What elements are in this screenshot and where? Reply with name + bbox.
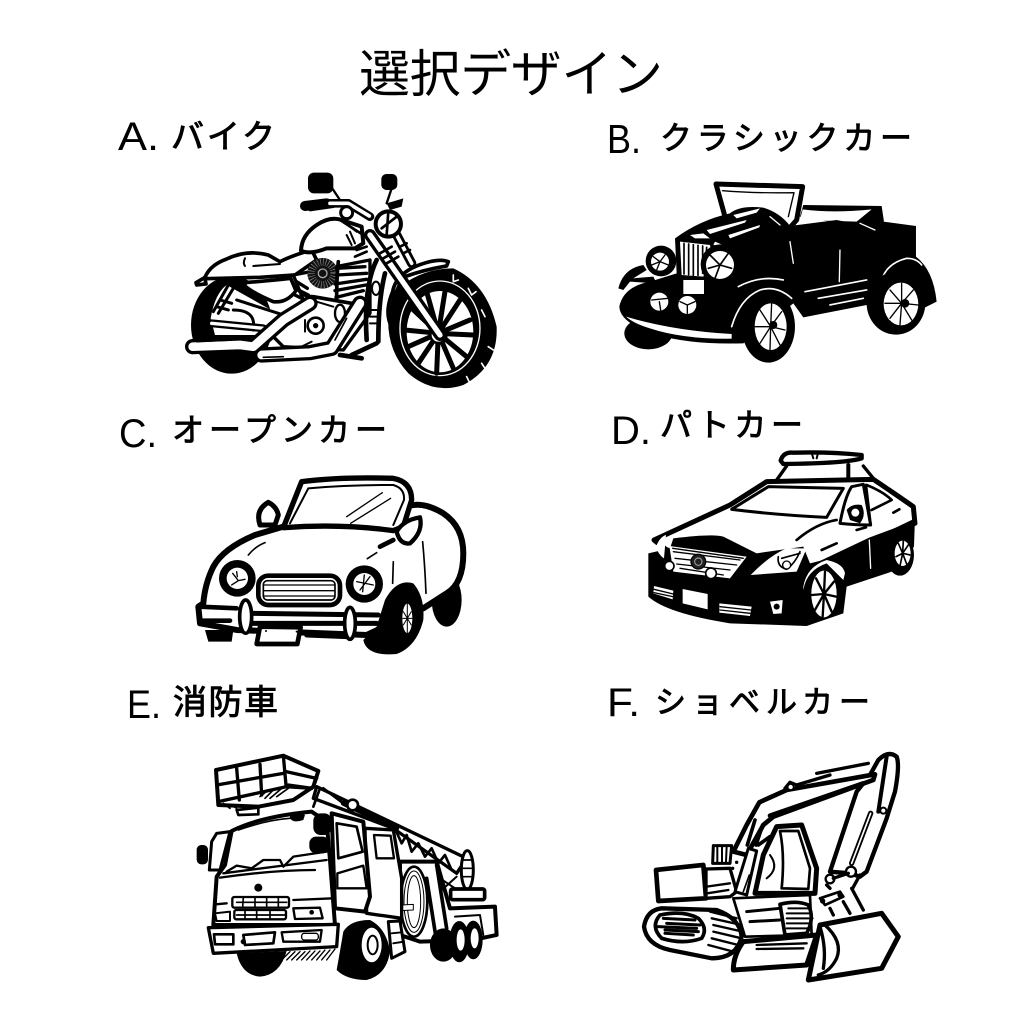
- rear wheel: [191, 276, 272, 374]
- radiator grille: [680, 242, 712, 277]
- seat: [196, 250, 317, 285]
- rear wheel: [432, 573, 462, 627]
- exhaust lower: [262, 303, 360, 355]
- label B: クラシックカー: B.: [607, 116, 641, 162]
- arm linkage: [826, 875, 834, 883]
- license plate: [257, 627, 301, 644]
- boom: [733, 774, 875, 855]
- engine fins: [295, 267, 367, 300]
- illustration: police car: [648, 452, 915, 626]
- dozer blade: [733, 935, 817, 970]
- grille: [232, 897, 289, 908]
- headlight: [376, 211, 401, 237]
- label C: オープンカー: C.: [119, 412, 157, 456]
- engine housing: [656, 865, 706, 901]
- illustration: convertible car: [198, 478, 463, 654]
- front grille: [669, 546, 747, 578]
- folding windshield frame: [716, 184, 803, 233]
- front wheel: [742, 291, 795, 363]
- cab front: [213, 812, 335, 925]
- car body: [198, 505, 463, 635]
- label D: パトカー: パトカー: [660, 407, 803, 443]
- cab: [755, 825, 817, 893]
- underside hatching: [282, 949, 335, 960]
- illustration: classic car: [618, 184, 937, 363]
- label C: オープンカー: オープンカー: [172, 412, 387, 448]
- fog lamps: [665, 561, 674, 571]
- hood highlights: [690, 208, 760, 247]
- large headlight: [701, 244, 741, 284]
- grille: [258, 576, 340, 605]
- front wheel tire: [388, 268, 497, 388]
- front left wheel: [237, 951, 287, 977]
- right mirror: [397, 517, 421, 544]
- right mirrors: [313, 813, 332, 835]
- front right wheel: [337, 920, 390, 980]
- title: 選択デザイン: [359, 46, 663, 103]
- label E: 消防車: 消防車: [173, 684, 278, 722]
- right headlight: [751, 548, 807, 575]
- headlights: [219, 560, 256, 597]
- windshield frame: [283, 478, 412, 531]
- label E: 消防車: [127, 683, 278, 727]
- front wheel: [803, 560, 845, 590]
- arm cylinder: [852, 813, 871, 863]
- black lower body: [648, 518, 915, 626]
- side mirror: [847, 505, 864, 523]
- engine body: [270, 260, 370, 350]
- illustration: excavator: [644, 754, 898, 980]
- illustration: fire truck: [197, 756, 497, 980]
- handlebar and grips: [305, 203, 327, 206]
- left headlight: [656, 535, 666, 558]
- right track: [780, 902, 811, 935]
- license plate: [683, 589, 708, 609]
- upper deck: [733, 895, 812, 937]
- left fender wing: [618, 265, 657, 290]
- car white body: [654, 479, 915, 570]
- side cover: [245, 278, 296, 302]
- frame downtube: [340, 260, 385, 358]
- fork tubes: [370, 235, 440, 335]
- bumper: [200, 607, 237, 621]
- windshield: [732, 487, 843, 517]
- label F: ショベルカー: [607, 681, 870, 725]
- fender: [388, 260, 448, 323]
- body trim highlights: [732, 258, 922, 327]
- bumper vents: [653, 586, 752, 616]
- truck rear deck: [400, 862, 497, 942]
- front wheel: [363, 582, 424, 654]
- left mirror: [209, 832, 230, 870]
- hose reel: [401, 867, 427, 937]
- left mirror: [259, 502, 278, 525]
- rear wheel: [886, 534, 914, 576]
- engine exhaust: [713, 846, 732, 863]
- label F: ショベルカー: F.: [607, 681, 640, 725]
- label D: パトカー: [611, 407, 803, 453]
- rear wheels: [430, 928, 457, 962]
- label A: バイク: [118, 115, 275, 159]
- label B: クラシックカー: クラシックカー: [660, 120, 912, 156]
- folded top: [800, 205, 884, 227]
- roof light bar: [781, 452, 862, 464]
- left track: [644, 908, 742, 958]
- boom cylinders: [735, 848, 757, 895]
- emblem: [254, 884, 262, 892]
- front lower wheel: [624, 317, 672, 349]
- rear wheel: [867, 272, 925, 335]
- step: [388, 921, 405, 958]
- small lamps: [646, 246, 676, 276]
- engine air cleaner: [307, 258, 338, 289]
- side windows: [840, 484, 871, 525]
- bucket: [808, 913, 898, 980]
- label E: 消防車: E.: [127, 683, 161, 727]
- front wheel spokes: [407, 291, 473, 372]
- mirrors: [308, 173, 333, 193]
- exhaust upper: [193, 303, 310, 347]
- cab side: [332, 813, 370, 912]
- tank: [301, 219, 363, 252]
- arm: [830, 754, 898, 877]
- basket platform: [216, 756, 318, 807]
- illustration: motorcycle: [191, 173, 497, 388]
- bumper: [208, 924, 338, 953]
- ladder wheel: [461, 851, 473, 889]
- label C: オープンカー: [119, 412, 387, 456]
- rear cab door: [365, 828, 402, 918]
- body silhouette: [619, 207, 937, 344]
- label B: クラシックカー: [607, 116, 912, 162]
- swingarm: [212, 323, 263, 328]
- label F: ショベルカー: ショベルカー: [655, 685, 870, 720]
- label D: パトカー: D.: [611, 409, 651, 453]
- crankcase cover: [308, 318, 324, 334]
- label A: バイク: A.: [118, 115, 159, 159]
- label A: バイク: バイク: [171, 118, 275, 155]
- ladder boom: [313, 787, 467, 873]
